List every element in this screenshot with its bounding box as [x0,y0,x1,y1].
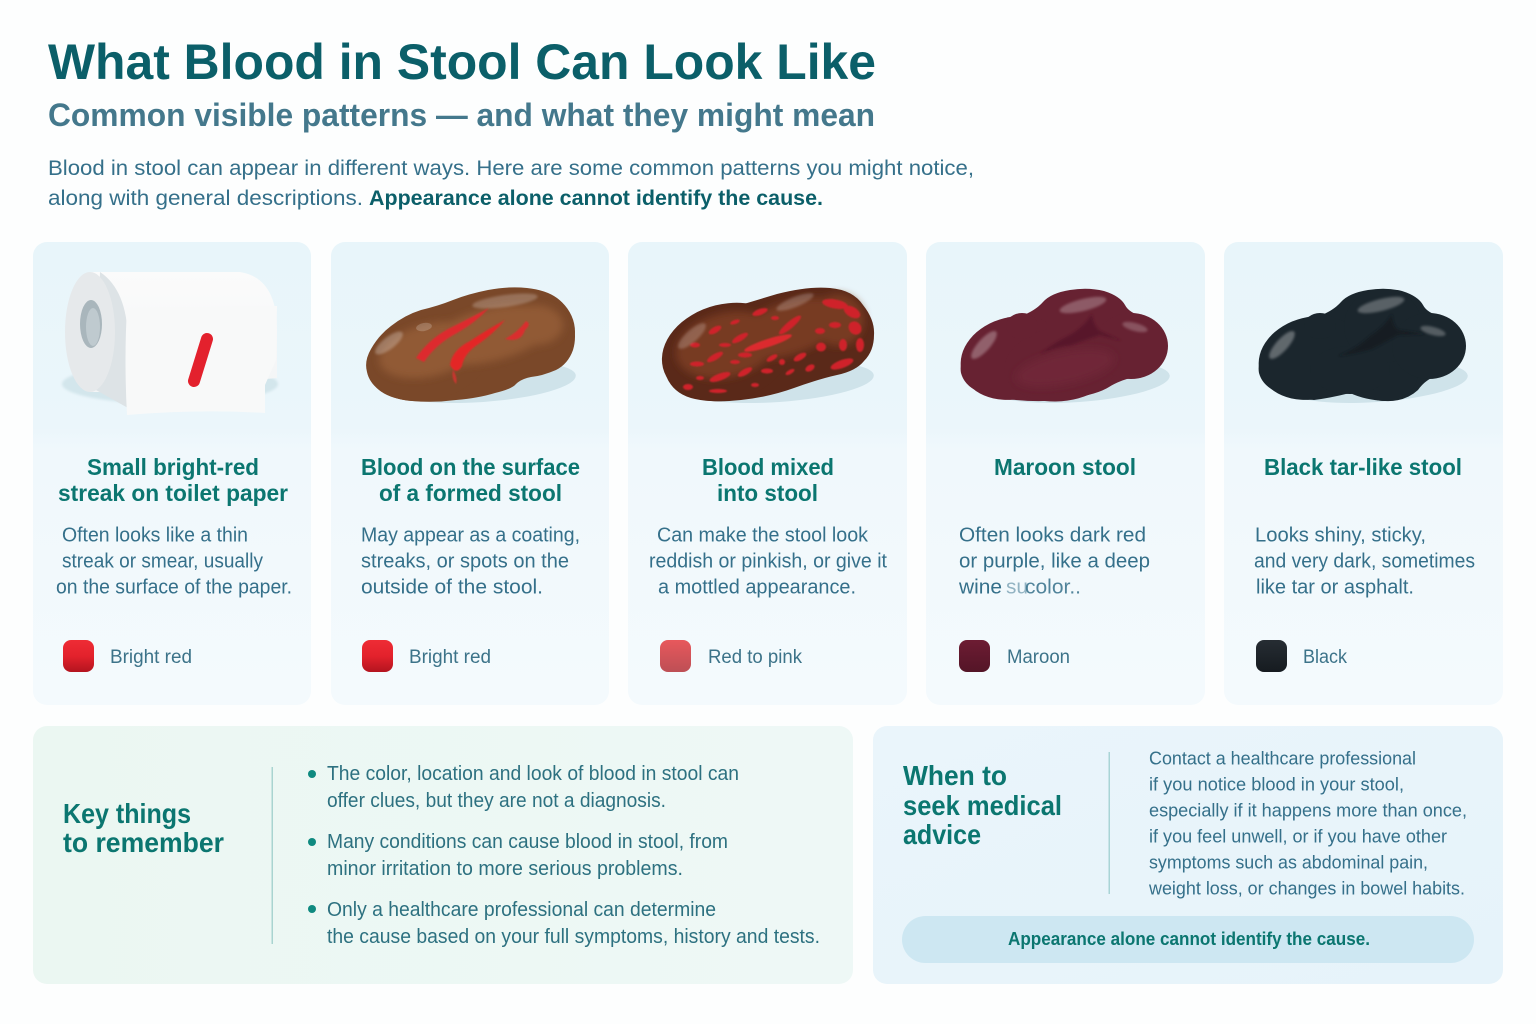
description [1254,524,1475,598]
heading: Black tar-like stool [1264,454,1462,480]
heading [903,760,1062,850]
title: What Blood in Stool Can Look Like [48,34,876,90]
advice text: Contact a healthcare professional [1149,748,1416,768]
intro text: along with general descriptions. [48,186,363,210]
advice text: weight loss, or changes in bowel habits. [1148,878,1465,898]
description: wine [958,576,1002,598]
bullet list: minor irritation to more serious problems. [327,858,683,880]
bullet list: offer clues, but they are not a diagnosis. [327,790,666,812]
intro text: Appearance alone cannot identify the cause. [369,186,823,210]
colour swatch: bright red [63,640,192,672]
panel: maroon stool [926,242,1205,705]
description: color.. [1025,576,1081,598]
heading [63,798,224,858]
bullet list: The color, location and look of blood in stool can [327,763,739,785]
description [958,524,1150,598]
heading [58,454,288,506]
description: reddish or pinkish, or give it [649,550,887,572]
heading: to remember [63,827,224,858]
description: streak or smear, usually [62,550,263,572]
icon: maroon stool [952,289,1171,411]
heading: into stool [717,480,818,506]
heading: Small bright-red [87,454,259,480]
description: like tar or asphalt. [1256,576,1414,598]
description [361,524,580,598]
heading: of a formed stool [379,480,562,506]
panel: black tar-like stool [1224,242,1503,705]
description: on the surface of the paper. [56,576,292,598]
intro text [48,156,974,210]
description [649,524,887,598]
panel: blood mixed into stool [628,242,907,705]
heading: seek medical [903,790,1062,821]
description: or purple, like a deep [959,550,1150,572]
description: a mottled appearance. [658,576,856,598]
intro text: Blood in stool can appear in different ways. Here are some common patterns you might notice, [48,156,974,180]
description: Often looks dark red [959,524,1146,546]
icon: formed stool with surface blood [359,287,577,412]
description: May appear as a coating, [361,524,580,546]
advice text: symptoms such as abdominal pain, [1149,852,1428,872]
icon: black stool [1250,289,1469,411]
colour swatch: bright red: Bright red [409,647,491,668]
heading [702,454,834,506]
panel: blood on the surface [331,242,609,705]
description: Often looks like a thin [62,524,248,546]
bullet list: Many conditions can cause blood in stool, from [327,831,728,853]
heading [361,454,580,506]
description: su [1006,576,1028,598]
panel: key things to remember [33,726,853,984]
panel: when to seek medical advice [873,726,1503,984]
colour swatch: black: Black [1303,647,1347,668]
colour swatch: maroon [959,640,1070,672]
colour swatch: black [1256,640,1347,672]
advice text: if you notice blood in your stool, [1149,774,1404,794]
colour swatch: maroon: Maroon [1007,647,1070,668]
description [56,524,292,598]
panel: small bright-red streak [33,242,311,705]
callout pill [902,916,1474,963]
advice text: especially if it happens more than once, [1149,800,1467,820]
colour swatch: red to pink: Red to pink [708,647,802,668]
heading: Key things [63,798,191,829]
heading: streak on toilet paper [58,480,288,506]
callout pill: Appearance alone cannot identify the cause. [1008,929,1370,949]
colour swatch: bright red [362,640,491,672]
description: outside of the stool. [361,576,543,598]
bullet list: Only a healthcare professional can determine [327,899,716,921]
colour swatch: bright red: Bright red [110,647,192,668]
icon: stool with mixed blood [651,285,875,415]
subtitle: Common visible patterns — and what they might mean [48,97,875,133]
icon: toilet paper roll [62,272,278,415]
description: Can make the stool look [657,524,869,546]
description: streaks, or spots on the [361,550,569,572]
colour swatch: red to pink [660,640,802,672]
heading: Blood on the surface [361,454,580,480]
advice text: if you feel unwell, or if you have other [1149,826,1447,846]
description: Looks shiny, sticky, [1255,524,1426,546]
advice text [1148,748,1467,898]
heading: Blood mixed [702,454,834,480]
description: and very dark, sometimes [1254,550,1475,572]
heading: Maroon stool [994,454,1136,480]
heading: advice [903,819,981,850]
bullet list [308,763,820,948]
bullet list: the cause based on your full symptoms, history and tests. [327,926,820,948]
heading: When to [903,760,1007,791]
